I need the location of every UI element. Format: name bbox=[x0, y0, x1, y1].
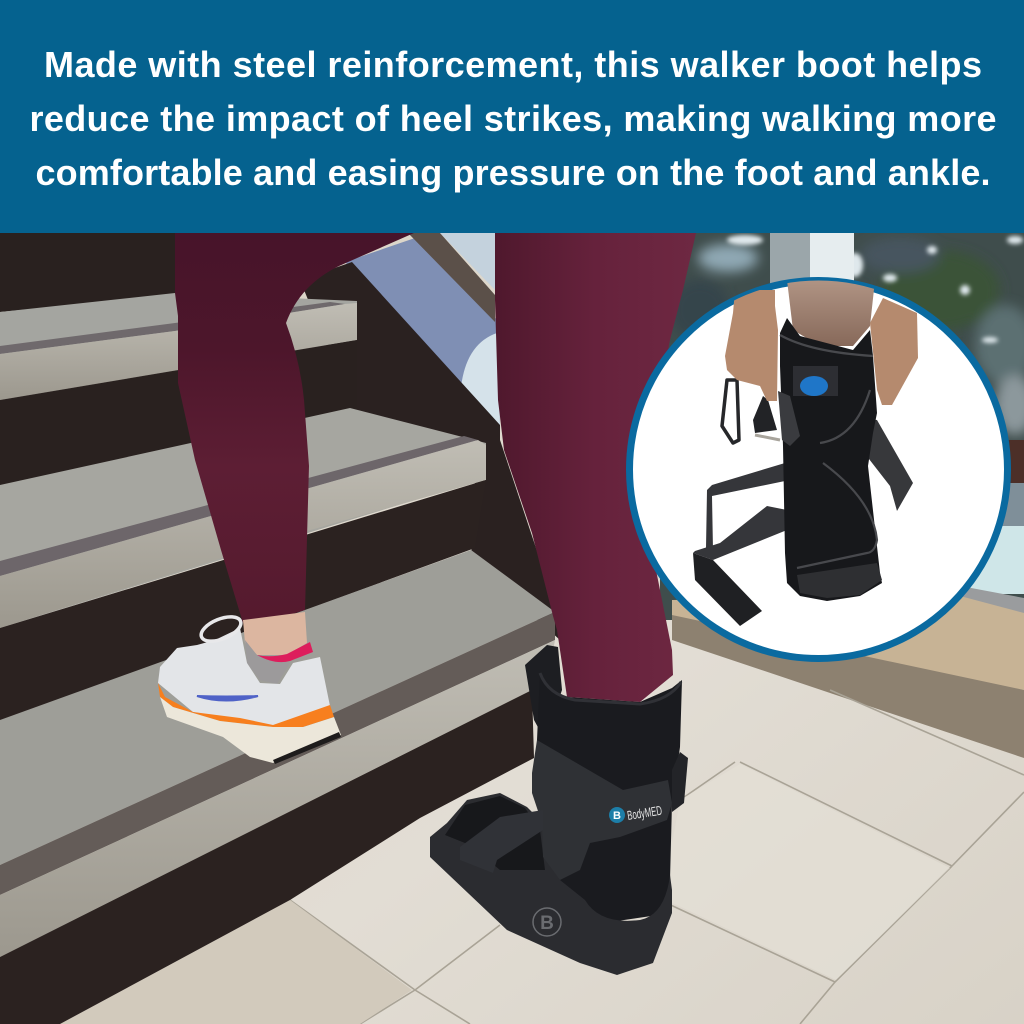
inset: right hand bbox=[870, 298, 918, 405]
window mullion bbox=[770, 233, 854, 284]
step 1 bbox=[0, 293, 357, 400]
brand badge bbox=[609, 807, 625, 823]
inset: boot body bbox=[780, 318, 882, 601]
photo: staircase bbox=[0, 233, 560, 1024]
inset: sole bbox=[797, 563, 882, 598]
brand badge: B bbox=[613, 810, 621, 822]
rear shell bbox=[525, 645, 562, 740]
dark stair stringer bbox=[300, 262, 560, 640]
brand name: BodyMED bbox=[626, 803, 663, 823]
sock bbox=[245, 640, 290, 684]
inset: boot piping bbox=[780, 335, 877, 568]
title text: Made with steel reinforcement, this walker boot helps bbox=[44, 44, 982, 85]
title text bbox=[30, 44, 996, 193]
inset: label patch bbox=[793, 366, 838, 396]
stair glass and handrail bbox=[345, 233, 500, 425]
toe strap bbox=[460, 810, 543, 873]
floor tile joints bbox=[290, 690, 1024, 1024]
inset: short strap and buckle bbox=[753, 396, 780, 440]
sole shell bbox=[430, 793, 672, 975]
riser 1 bbox=[0, 340, 357, 487]
bench ledge bbox=[672, 596, 1024, 758]
title banner bbox=[0, 0, 1024, 233]
swoosh bbox=[197, 696, 258, 700]
inset: hanging loop bbox=[722, 380, 739, 443]
figure: raised foot with white sneaker bbox=[158, 612, 341, 764]
sole bbox=[160, 697, 341, 763]
pink sock cuff bbox=[257, 642, 313, 662]
snow on trees bbox=[727, 235, 1023, 343]
inset: lower strap right bbox=[869, 420, 913, 511]
riser 3 bbox=[0, 690, 534, 1024]
inset: left hand bbox=[725, 290, 778, 401]
sole tread bbox=[273, 732, 341, 764]
upper wall bbox=[0, 233, 180, 312]
step 2 bbox=[0, 408, 486, 628]
window frame at right edge bbox=[963, 440, 1024, 613]
shoe upper bbox=[158, 628, 330, 726]
riser 2 bbox=[0, 480, 486, 722]
step 3 bbox=[0, 550, 555, 957]
inset: leg bbox=[787, 280, 875, 346]
inset: left straps bbox=[693, 463, 787, 626]
laces bbox=[198, 612, 244, 646]
buckle bbox=[672, 752, 688, 812]
inset circle: boot being fastened bbox=[630, 280, 1008, 658]
figure: leggings bbox=[175, 233, 696, 702]
left legging bbox=[175, 233, 414, 623]
inset: blue dot bbox=[800, 376, 828, 396]
title text: comfortable and easing pressure on the foot and ankle. bbox=[36, 152, 990, 193]
right legging bbox=[495, 233, 696, 702]
figure: walker boot bbox=[430, 645, 688, 975]
orange midsole stripe bbox=[158, 683, 334, 727]
title text: reduce the impact of heel strikes, making walking more bbox=[30, 98, 996, 139]
toe cushion bbox=[445, 796, 545, 870]
cuff lip bbox=[540, 673, 681, 704]
ankle bbox=[243, 612, 307, 655]
heel logo: B bbox=[540, 913, 554, 934]
photo: floor and window background bbox=[0, 233, 1024, 1024]
boot liner bbox=[537, 673, 682, 925]
ankle strap bbox=[532, 740, 672, 880]
inset: side flap bbox=[778, 391, 800, 446]
inset contents bbox=[693, 280, 918, 626]
heel logo bbox=[533, 908, 561, 936]
